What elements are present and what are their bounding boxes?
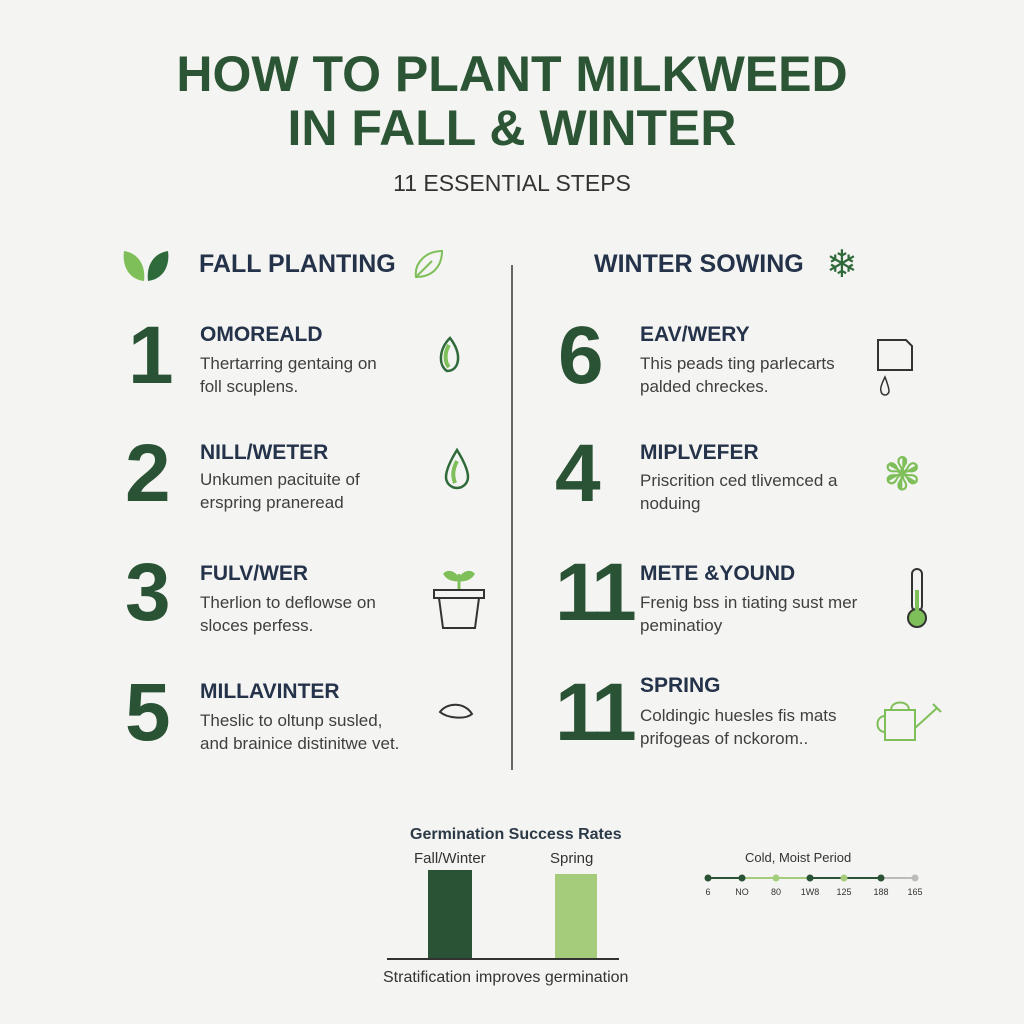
icon: snowflake: ❄	[826, 244, 858, 286]
step 11b: SPRING	[640, 674, 721, 697]
step 4	[555, 428, 922, 519]
title: IN FALL & WINTER	[287, 100, 737, 156]
step 11a: peminatioy	[640, 616, 722, 635]
timeline: cold moist period: Cold, Moist Period	[745, 850, 851, 865]
heading: winter sowing: WINTER SOWING	[594, 250, 804, 278]
icon: thermometer	[907, 568, 927, 628]
step 2: erspring praneread	[200, 493, 344, 512]
timeline: cold moist period: 6	[705, 887, 711, 897]
title	[176, 46, 848, 156]
step 5: 5	[125, 667, 171, 758]
step 3: 3	[125, 547, 171, 638]
icon: seed pod	[438, 704, 474, 719]
divider	[511, 265, 513, 770]
bar chart: Spring	[550, 850, 593, 867]
step 4: Priscrition ced tlivemced a	[640, 471, 837, 490]
step 1: OMOREALD	[200, 323, 322, 346]
step 11a	[555, 547, 927, 638]
step 3	[125, 547, 485, 638]
icon: leaves	[124, 251, 168, 281]
step 11a: Frenig bss in tiating sust mer	[640, 593, 857, 612]
bar chart: Germination Success Rates	[410, 826, 622, 843]
step 11b: Coldingic huesles fis mats	[640, 706, 837, 725]
step 4: noduing	[640, 494, 701, 513]
icon: seed	[440, 336, 460, 372]
icon: drop	[444, 448, 470, 490]
bar chart	[383, 826, 628, 986]
step 2: 2	[125, 428, 171, 519]
icon: flower: ❃	[883, 448, 922, 500]
step 6	[558, 310, 913, 401]
step 5: and brainice distinitwe vet.	[200, 734, 399, 753]
step 5	[125, 667, 474, 758]
icon: watering can	[876, 702, 942, 741]
title: HOW TO PLANT MILKWEED	[176, 46, 848, 102]
icon: pot with sprout	[433, 570, 485, 629]
step 2	[125, 428, 470, 519]
icon: leaf outline	[414, 250, 443, 278]
step 3: FULV/WER	[200, 562, 308, 585]
step 5: Theslic to oltunp susled,	[200, 711, 382, 730]
step 11b: 11	[555, 667, 632, 758]
timeline: cold moist period: 165	[907, 887, 923, 897]
step 3: Therlion to deflowse on	[200, 593, 376, 612]
timeline: cold moist period: 80	[771, 887, 781, 897]
step 11b	[555, 667, 942, 758]
timeline: cold moist period	[704, 850, 923, 897]
step 1	[128, 310, 460, 401]
timeline: cold moist period: 1W8	[801, 887, 819, 897]
bar chart: Stratification improves germination	[383, 969, 628, 986]
heading: fall planting: FALL PLANTING	[199, 250, 396, 278]
step 4: 4	[555, 428, 601, 519]
step 3: sloces perfess.	[200, 616, 313, 635]
icon: container and drop	[877, 339, 913, 396]
step 2: Unkumen pacituite of	[200, 470, 360, 489]
step 11a: METE &YOUND	[640, 562, 795, 585]
step 6: This peads ting parlecarts	[640, 354, 835, 373]
timeline: cold moist period: 125	[836, 887, 852, 897]
timeline: cold moist period: NO	[735, 887, 749, 897]
step 4: MIPLVEFER	[640, 441, 759, 464]
step 6: 6	[558, 310, 604, 401]
timeline: cold moist period: 188	[873, 887, 889, 897]
step 11b: prifogeas of nckorom..	[640, 729, 808, 748]
step 6: EAV/WERY	[640, 323, 750, 346]
step 1: 1	[128, 310, 174, 401]
step 11a: 11	[555, 547, 632, 638]
step 1: Thertarring gentaing on	[200, 354, 377, 373]
step 6: palded chreckes.	[640, 377, 769, 396]
step 2: NILL/WETER	[200, 441, 328, 464]
subtitle: 11 ESSENTIAL STEPS	[393, 170, 631, 196]
step 5: MILLAVINTER	[200, 680, 340, 703]
bar chart: Fall/Winter	[414, 850, 486, 867]
step 1: foll scuplens.	[200, 377, 298, 396]
